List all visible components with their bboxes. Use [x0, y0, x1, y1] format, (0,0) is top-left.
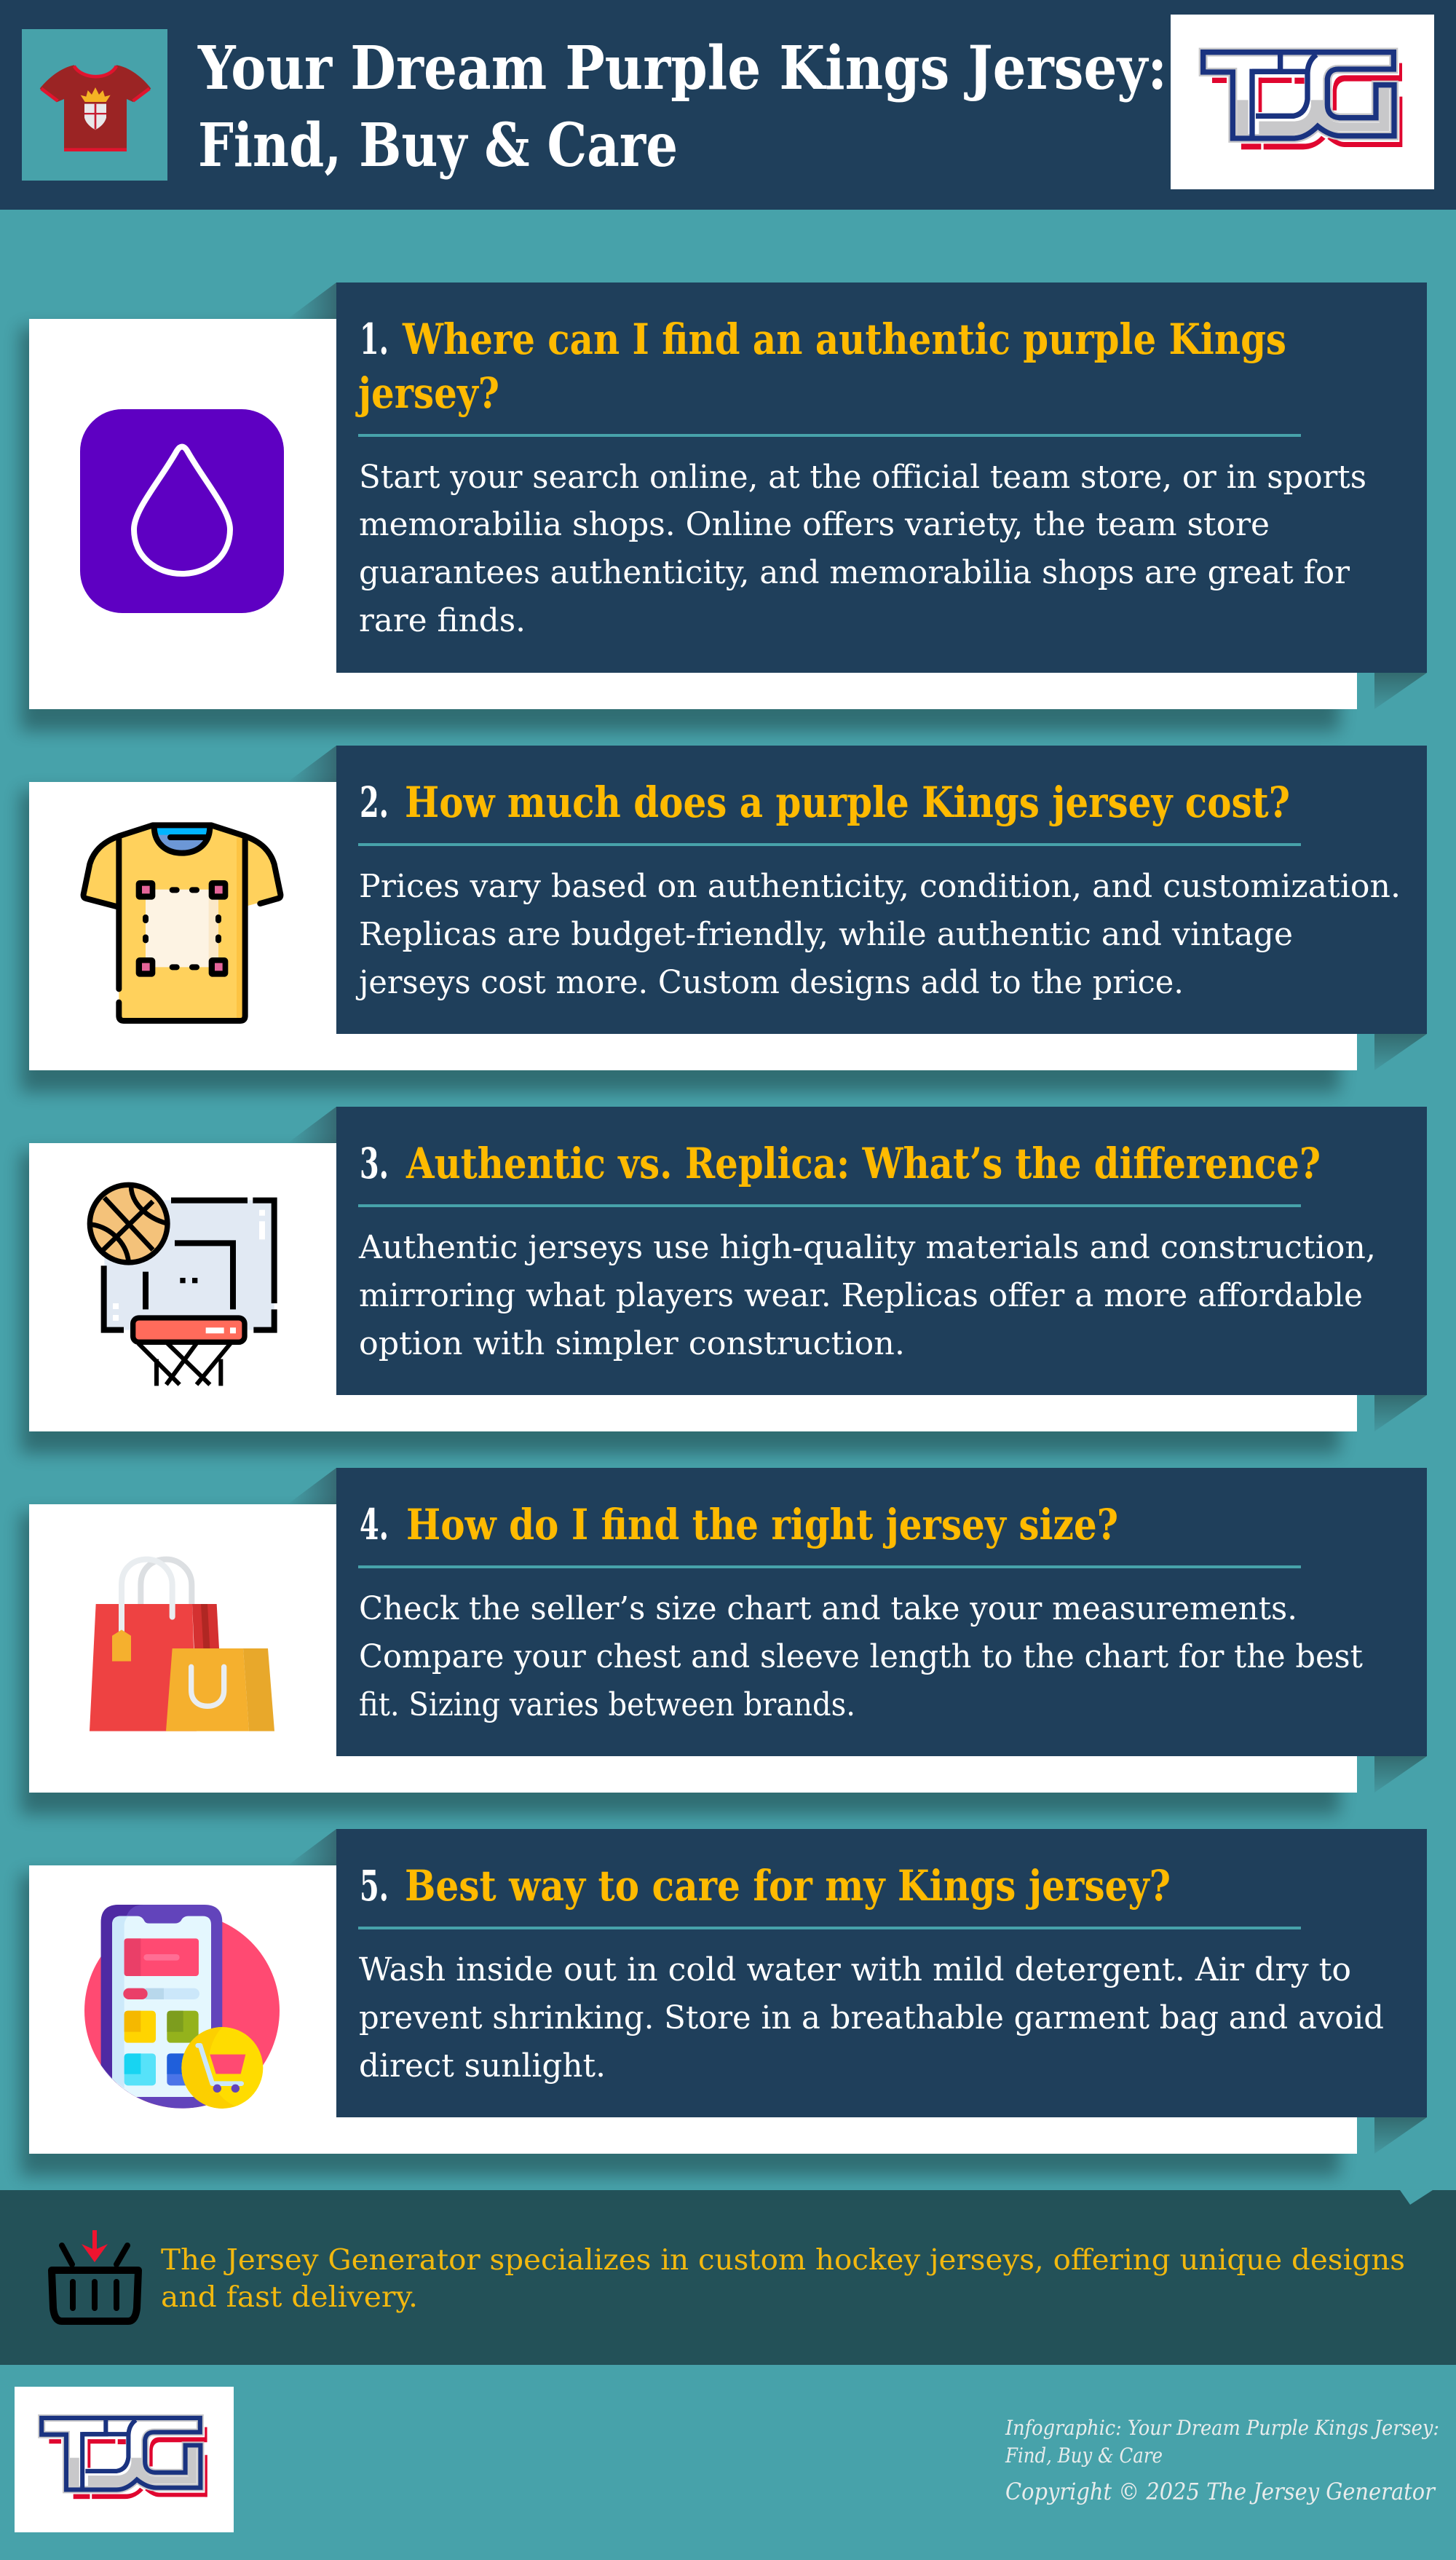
- icon: water drop: [80, 409, 284, 613]
- callout band: [0, 2190, 1456, 2365]
- header band: [0, 0, 1456, 210]
- title: [197, 33, 1167, 181]
- body text: Wash inside out in cold water with mild detergent. Air dry to: [359, 1951, 1351, 1988]
- body text: Compare your chest and sleeve length to the chart for the best: [359, 1638, 1363, 1675]
- body text: option with simpler construction.: [359, 1325, 905, 1362]
- callout text: [161, 2244, 1405, 2314]
- heading: [355, 315, 1286, 418]
- body text: fit. Sizing varies between brands.: [359, 1686, 855, 1723]
- heading: 1.: [360, 315, 389, 364]
- body text: [355, 868, 1401, 1001]
- heading: Authentic vs. Replica: What’s the difference?: [405, 1139, 1321, 1188]
- body text: memorabilia shops. Online offers variety, the team store: [359, 506, 1270, 543]
- body text: Prices vary based on authenticity, condition, and customization.: [359, 868, 1401, 905]
- heading: 3.: [360, 1139, 389, 1188]
- body text: [359, 1951, 1384, 2085]
- panel: question 4: [20, 1468, 1427, 1814]
- title: Find, Buy & Care: [198, 111, 678, 181]
- footer: [15, 2387, 1439, 2532]
- body text: Check the seller’s size chart and take your measurements.: [359, 1590, 1297, 1627]
- heading: 4.: [360, 1500, 389, 1549]
- body text: Start your search online, at the official team store, or in sports: [359, 459, 1366, 496]
- heading: Best way to care for my Kings jersey?: [405, 1861, 1171, 1911]
- source and copyright: [1005, 2416, 1439, 2505]
- title: Your Dream Purple Kings Jersey:: [197, 33, 1167, 103]
- body text: [358, 1229, 1376, 1362]
- icon: t-shirt with print area: [83, 825, 281, 1021]
- icon: basket with red arrow: [52, 2230, 138, 2321]
- heading: How much does a purple Kings jersey cost?: [405, 778, 1290, 827]
- icon: red jersey with crown and shield: [22, 29, 167, 181]
- heading: How do I find the right jersey size?: [406, 1500, 1118, 1549]
- body text: guarantees authenticity, and memorabilia shops are great for: [359, 554, 1350, 591]
- body text: rare finds.: [359, 602, 526, 639]
- icon: shopping bags: [90, 1560, 274, 1731]
- heading: Where can I find an authentic purple Kings: [402, 315, 1286, 364]
- icon: basketball hoop: [90, 1185, 274, 1386]
- panel: question 3: [20, 1107, 1427, 1453]
- panel: question 5: [20, 1829, 1427, 2176]
- source and copyright: Find, Buy & Care: [1005, 2444, 1163, 2468]
- panel: question 2: [20, 746, 1427, 1092]
- body text: [359, 459, 1366, 639]
- body text: prevent shrinking. Store in a breathable garment bag and avoid: [359, 1999, 1384, 2036]
- logo: TJG header: [1171, 15, 1434, 189]
- logo: TJG footer: [15, 2387, 234, 2532]
- callout text: The Jersey Generator specializes in custom hockey jerseys, offering unique designs: [161, 2244, 1405, 2277]
- icon: phone shopping app: [84, 1905, 280, 2109]
- callout text: and fast delivery.: [161, 2281, 418, 2314]
- body text: mirroring what players wear. Replicas offer a more affordable: [359, 1277, 1363, 1314]
- heading: 2.: [360, 778, 389, 827]
- body text: jerseys cost more. Custom designs add to the price.: [355, 964, 1184, 1001]
- heading: 5.: [360, 1861, 389, 1911]
- body text: direct sunlight.: [359, 2047, 606, 2085]
- body text: [359, 1590, 1363, 1723]
- body text: Authentic jerseys use high-quality materials and construction,: [358, 1229, 1376, 1266]
- heading: jersey?: [355, 368, 499, 418]
- body text: Replicas are budget-friendly, while authentic and vintage: [359, 916, 1293, 953]
- panel: question 1: [20, 283, 1427, 731]
